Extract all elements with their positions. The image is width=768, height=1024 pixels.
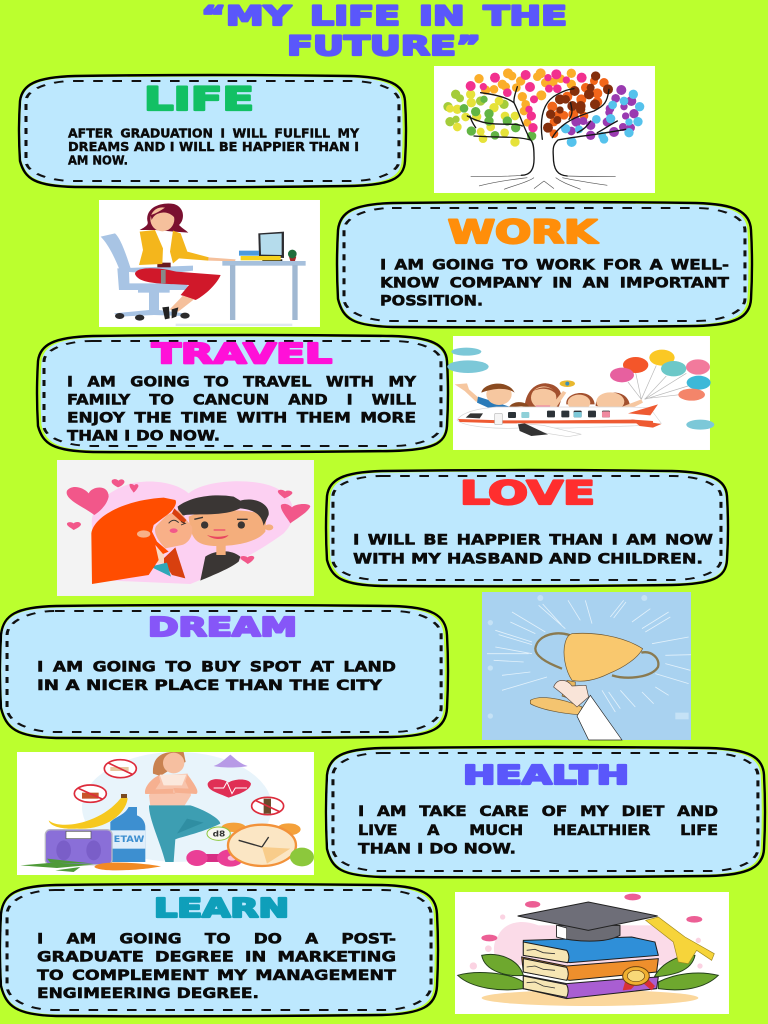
books [522, 937, 658, 999]
text: life body: DREAMS AND I WILL BE HAPPIER THAN I [68, 140, 359, 154]
text: travel body: THAN I DO NOW. [67, 428, 220, 444]
text: love body [353, 532, 713, 568]
leaves [458, 954, 718, 990]
hearts [481, 894, 702, 941]
jacket [158, 232, 173, 257]
panel: work [337, 202, 752, 327]
text: health body: THAN I DO NOW. [358, 842, 516, 858]
text: dream body: I AM GOING TO BUY SPOT AT LAND [37, 660, 396, 676]
legs [135, 268, 221, 300]
image: trophy [482, 592, 691, 740]
heading: learn: LEARN [154, 894, 289, 924]
text: health body: I AM TAKE CARE OF MY DIET AND [358, 804, 718, 820]
small hearts [67, 479, 310, 564]
image: health and wellness: d8 [213, 830, 226, 839]
tassel [646, 917, 714, 964]
title [201, 1, 567, 62]
text: dream body: IN A NICER PLACE THAN THE CITY [37, 678, 383, 694]
monitor [258, 232, 284, 258]
pink blob [494, 922, 682, 965]
heading: work: WORK [448, 213, 599, 251]
dumbbell [202, 854, 225, 862]
text: learn body: I AM GOING TO DO A POST- [37, 932, 396, 948]
greens [20, 859, 94, 872]
text: love body: I WILL BE HAPPIER THAN I AM NOW [353, 532, 713, 548]
text: work body: I AM GOING TO WORK FOR A WELL- [380, 258, 729, 274]
text: life body: AFTER GRADUATION I WILL FULFILL MY [68, 126, 359, 140]
bottle [110, 807, 145, 862]
heading: dream: DREAM [148, 613, 297, 643]
image: kissing couple [57, 460, 314, 596]
image: graduation cap and books [455, 892, 729, 1014]
hair back [140, 203, 188, 233]
panel: travel [37, 335, 448, 452]
text: travel body [67, 374, 417, 444]
image: family on airplane [447, 336, 714, 450]
tag [207, 827, 230, 840]
carrot [94, 863, 161, 870]
text: travel body: ENJOY THE TIME WITH THEM MORE [67, 410, 416, 426]
handles [535, 633, 570, 669]
sleeve [577, 695, 622, 740]
text: travel body: FAMILY TO CANCUN AND I WILL [67, 392, 416, 408]
desk [222, 261, 306, 266]
image: health and wellness: ETAW [114, 835, 145, 845]
clock [222, 823, 246, 832]
cup [564, 633, 643, 681]
hand [554, 680, 589, 707]
text: learn body [37, 932, 396, 1002]
text: learn body: ENGIMEERING DEGREE. [37, 986, 259, 1002]
image: health and wellness [17, 752, 314, 875]
forbidden icons [74, 760, 284, 815]
title: FUTURE” [287, 31, 481, 62]
lotus [214, 755, 248, 767]
panel: love [326, 470, 728, 586]
plane [457, 407, 661, 428]
heading: health: HEALTH [463, 761, 629, 791]
image: woman at desk [99, 200, 320, 327]
text: learn body: GRADUATE DEGREE IN MARKETING [37, 950, 396, 966]
text: travel body: I AM GOING TO TRAVEL WITH MY [67, 374, 417, 390]
text: work body: KNOW COMPANY IN AN IMPORTANT [380, 276, 729, 292]
panel: dream [0, 605, 448, 738]
chair [101, 233, 193, 317]
ground [482, 990, 698, 1006]
balloons [623, 357, 648, 373]
man [200, 551, 240, 581]
text: learn body: TO COMPLEMENT MY MANAGEMENT [37, 968, 396, 984]
banana [49, 795, 128, 829]
panel: health [326, 747, 765, 877]
pink heart [92, 481, 293, 584]
medal [623, 979, 655, 990]
cap [557, 925, 620, 941]
heading: travel: TRAVEL [152, 337, 332, 370]
heart [208, 779, 251, 798]
base [562, 680, 575, 700]
clouds [447, 348, 714, 430]
heading: love: LOVE [460, 474, 595, 512]
text: life body: AM NOW. [68, 154, 128, 168]
rays [487, 600, 691, 712]
yoga woman [153, 752, 186, 776]
text: life body [68, 126, 359, 168]
text: love body: WITH MY HASBAND AND CHILDREN. [353, 552, 703, 568]
text: health body [358, 804, 718, 858]
text: work body [380, 258, 729, 310]
text: dream body [37, 660, 396, 694]
image: colorful tree [434, 66, 655, 193]
apple [290, 848, 314, 866]
panel: life [19, 75, 406, 187]
panel: learn [0, 884, 438, 1016]
woman [162, 547, 185, 578]
scale [45, 830, 112, 865]
wing and engine [518, 423, 581, 437]
arms and people [455, 383, 480, 402]
text: health body: LIVE A MUCH HEALTHIER LIFE [358, 823, 718, 839]
text: work body: POSSITION. [380, 294, 483, 310]
heading: life: LIFE [144, 80, 254, 118]
balloon strings [628, 365, 688, 399]
title: “MY LIFE IN THE [201, 1, 567, 32]
